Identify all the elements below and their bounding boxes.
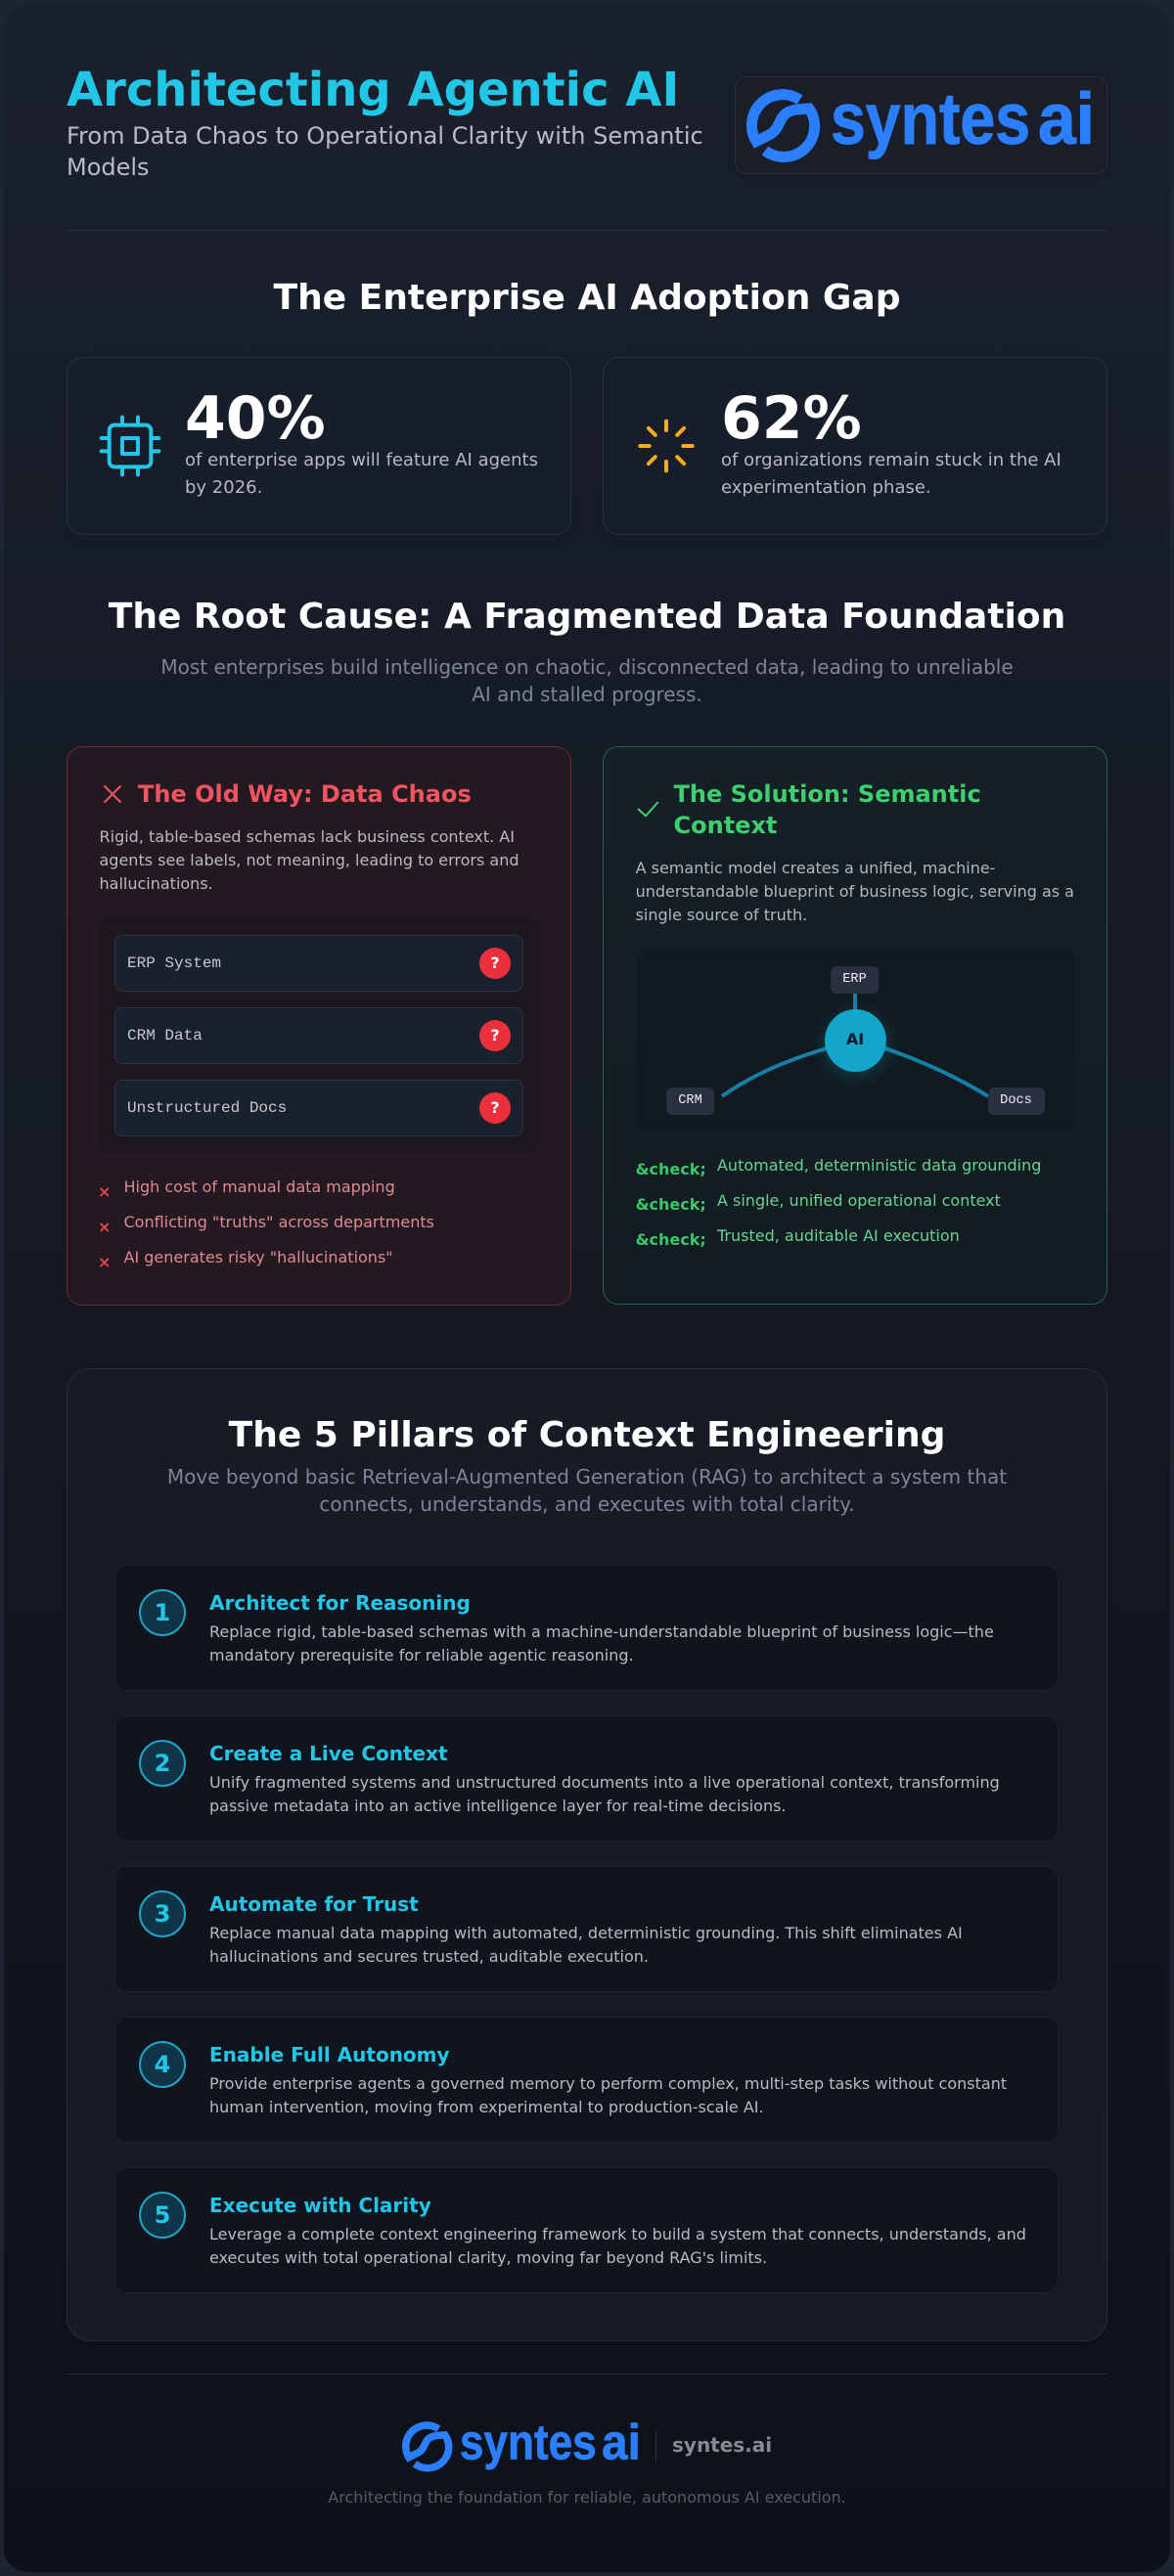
silo: CRM: CRM Data (127, 1027, 203, 1044)
connector lines (720, 994, 988, 1098)
stat value: 40% (185, 384, 326, 453)
footer logo: syntes (460, 2414, 597, 2469)
silo: ERP: ? (490, 954, 500, 972)
subtitle: Models (67, 154, 150, 181)
solution heading: The Solution: Semantic (673, 780, 981, 808)
icon: check (637, 801, 659, 818)
old way problems list: × (98, 1182, 111, 1201)
icon: chip (100, 415, 160, 477)
header logo box (735, 76, 1107, 174)
old way problems list: AI generates risky "hallucinations" (123, 1248, 393, 1266)
solution text: single source of truth. (636, 906, 807, 924)
subtitle (67, 122, 703, 181)
icon: syntes ai logo (746, 86, 1094, 162)
pillar 5: 5 (155, 2201, 170, 2229)
solution benefits list: A single, unified operational context (717, 1191, 1001, 1210)
solution text: A semantic model creates a unified, machine- (636, 859, 995, 877)
silo: ERP (114, 935, 523, 992)
node: AI hub (824, 1009, 886, 1072)
pillar 1: mandatory prerequisite for reliable agentic reasoning. (209, 1646, 634, 1665)
pillar 1: Architect for Reasoning (209, 1591, 471, 1615)
node: ERP: ERP (842, 972, 867, 987)
old way problems list: × (98, 1218, 111, 1236)
old way problems list: High cost of manual data mapping (123, 1177, 395, 1196)
subtitle: From Data Chaos to Operational Clarity with Semantic (67, 122, 703, 150)
pillar 4: Enable Full Autonomy (209, 2043, 450, 2066)
solution benefits list: Trusted, auditable AI execution (717, 1226, 960, 1245)
pillars intro (167, 1465, 1007, 1516)
title: Architecting Agentic AI (67, 63, 679, 117)
old way text (100, 827, 519, 893)
stat text (185, 450, 538, 498)
panel: 40% stat (67, 357, 571, 535)
silo: docs: Unstructured Docs (127, 1099, 287, 1117)
pillar 3: 3 (155, 1900, 170, 1928)
pillar 3: Replace manual data mapping with automated, deterministic grounding. This shift eliminates AI (209, 1924, 963, 1942)
pillar 5 (114, 2167, 1059, 2293)
footer site name: syntes.ai (672, 2433, 772, 2457)
solution benefits list (636, 1156, 1041, 1249)
stat text: by 2026. (185, 477, 262, 498)
solution benefits list: &check; (636, 1195, 706, 1214)
heading: root cause: The Root Cause: A Fragmented Data Foundation (109, 597, 1065, 637)
pillar 3: Automate for Trust (209, 1892, 419, 1916)
solution heading: Context (673, 812, 777, 839)
pillar 1: 1 (155, 1599, 170, 1626)
node: Docs: Docs (1000, 1093, 1032, 1108)
old way problems list: Conflicting "truths" across departments (123, 1213, 434, 1231)
icon: loader (638, 419, 695, 473)
pillar 2 (114, 1715, 1059, 1842)
root cause intro (160, 655, 1014, 706)
pillars heading: The 5 Pillars of Context Engineering (229, 1414, 945, 1455)
stat text (721, 450, 1061, 498)
pillar 4 (114, 2017, 1059, 2143)
pillar 5: Leverage a complete context engineering framework to build a system that connects, understands, and (209, 2225, 1026, 2243)
pillar 2: 2 (155, 1750, 170, 1777)
pillar 5: executes with total operational clarity, moving far beyond RAG's limits. (209, 2248, 767, 2267)
silo: CRM: ? (490, 1026, 500, 1044)
solution benefits list: &check; (636, 1160, 706, 1178)
icon: x (104, 784, 121, 804)
pillar 4: Provide enterprise agents a governed memory to perform complex, multi-step tasks without constant (209, 2074, 1007, 2093)
heading: adoption gap: The Enterprise AI Adoption Gap (274, 278, 900, 318)
pillar 3 (114, 1866, 1059, 1992)
panel: 62% stat (603, 357, 1107, 535)
old way text: agents see labels, not meaning, leading to errors and (100, 851, 519, 869)
old way text: Rigid, table-based schemas lack business context. AI (100, 827, 515, 846)
pillar 1: Replace rigid, table-based schemas with a machine-understandable blueprint of business logic—the (209, 1622, 994, 1641)
old way problems list (98, 1177, 434, 1271)
pillar 3: hallucinations and secures trusted, auditable execution. (209, 1947, 649, 1966)
node: ERP (831, 966, 879, 994)
pillar 1 (114, 1565, 1059, 1691)
root cause intro: AI and stalled progress. (472, 683, 702, 706)
pillar 2: Unify fragmented systems and unstructured documents into a live operational context, transforming (209, 1773, 1000, 1792)
silo: CRM (114, 1007, 523, 1064)
pillar 2: Create a Live Context (209, 1742, 448, 1765)
footer tagline: Architecting the foundation for reliable, autonomous AI execution. (328, 2488, 846, 2507)
stat text: experimentation phase. (721, 477, 931, 498)
stat text: of organizations remain stuck in the AI (721, 450, 1061, 470)
panel: solution (603, 746, 1107, 1305)
node: CRM: CRM (678, 1093, 702, 1108)
footer logo: ai (602, 2414, 641, 2469)
old way text: hallucinations. (100, 874, 213, 893)
node: CRM (666, 1088, 714, 1115)
old way heading: The Old Way: Data Chaos (138, 780, 472, 808)
pillar 4: 4 (155, 2051, 170, 2078)
pillar 5: Execute with Clarity (209, 2194, 431, 2217)
solution benefits list: &check; (636, 1230, 706, 1249)
pillar 4: human intervention, moving from experimental to production-scale AI. (209, 2098, 764, 2116)
silo: docs (114, 1080, 523, 1136)
silo: ERP: ERP System (127, 955, 221, 972)
node: AI hub: AI (846, 1030, 864, 1048)
stat value: 62% (721, 384, 862, 453)
pillars intro: Move beyond basic Retrieval-Augmented Generation (RAG) to architect a system that (167, 1465, 1007, 1488)
panel: old way (67, 746, 571, 1306)
chaos data silos (99, 919, 539, 1152)
pillars intro: connects, understands, and executes with total clarity. (319, 1492, 855, 1516)
node: Docs (988, 1088, 1045, 1115)
solution text: understandable blueprint of business logic, serving as a (636, 882, 1074, 901)
solution text (636, 859, 1074, 924)
solution heading (673, 780, 981, 839)
stat text: of enterprise apps will feature AI agents (185, 450, 538, 470)
old way problems list: × (98, 1253, 111, 1271)
hub diagram (636, 952, 1074, 1130)
pillar 2: passive metadata into an active intelligence layer for real-time decisions. (209, 1797, 787, 1815)
solution benefits list: Automated, deterministic data grounding (717, 1156, 1041, 1175)
silo: docs: ? (490, 1098, 500, 1117)
panel: five pillars (67, 1368, 1107, 2341)
footer logo (401, 2414, 641, 2472)
root cause intro: Most enterprises build intelligence on chaotic, disconnected data, leading to unreliable (160, 655, 1014, 679)
